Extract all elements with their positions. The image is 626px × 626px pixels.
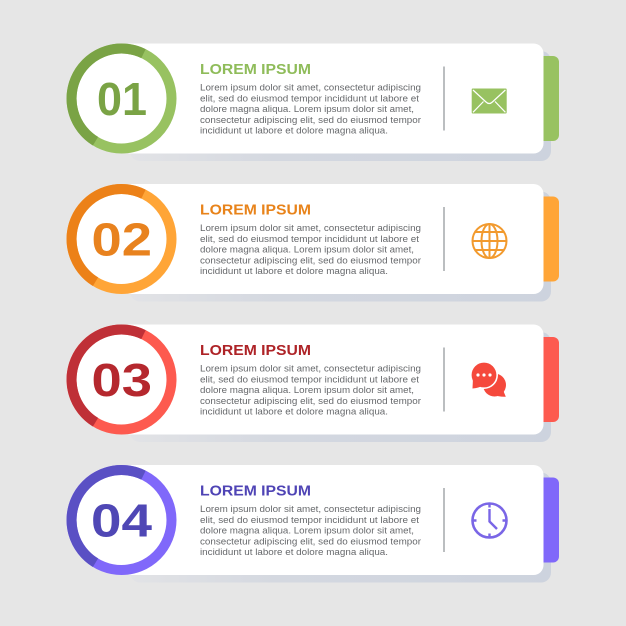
card shadow — [130, 51, 551, 161]
icon: clock — [472, 504, 506, 538]
tab: purple — [530, 478, 559, 562]
text block: consectetur adipiscing elit, sed do eiusmod tempor — [200, 536, 422, 547]
heading: LOREM IPSUM — [200, 342, 311, 359]
text block: dolore magna aliqua. Lorem ipsum dolor sit amet, — [200, 526, 414, 536]
text block: elit, sed do eiusmod tempor incididunt ut labore et — [200, 374, 419, 385]
text block: incididunt ut labore et dolore magna aliqua. — [200, 126, 388, 136]
heading: LOREM IPSUM — [200, 482, 311, 499]
panel: step 03 — [72, 324, 559, 442]
card — [121, 184, 544, 294]
number 03: 03 — [92, 354, 152, 406]
divider — [443, 66, 445, 130]
panel: step 01 — [72, 44, 559, 161]
card — [121, 44, 544, 154]
panel: step 04 — [72, 465, 559, 582]
text block: dolore magna aliqua. Lorem ipsum dolor sit amet, — [200, 244, 414, 256]
text block: incididunt ut labore et dolore magna aliqua. — [200, 266, 388, 277]
text block: Lorem ipsum dolor sit amet, consectetur adipiscing — [200, 504, 421, 515]
panel: step 02 — [72, 184, 559, 302]
number ring — [72, 470, 172, 570]
card — [121, 465, 544, 575]
text block — [200, 223, 422, 277]
text block: dolore magna aliqua. Lorem ipsum dolor sit amet, — [200, 385, 414, 396]
icon: chat bubbles — [470, 361, 506, 397]
text block: consectetur adipiscing elit, sed do eiusmod tempor — [200, 255, 422, 266]
card shadow — [130, 472, 551, 582]
divider — [443, 207, 445, 271]
text block: incididunt ut labore et dolore magna aliqua. — [200, 547, 388, 558]
tab: orange — [530, 196, 559, 282]
text block — [200, 82, 422, 136]
text block: Lorem ipsum dolor sit amet, consectetur adipiscing — [200, 223, 421, 234]
text block: elit, sed do eiusmod tempor incididunt ut labore et — [200, 515, 419, 526]
number 01: 01 — [97, 73, 147, 125]
text block: consectetur adipiscing elit, sed do eiusmod tempor — [200, 396, 422, 407]
tab: red — [530, 337, 559, 422]
divider — [443, 348, 445, 412]
number ring — [72, 330, 172, 430]
number 04: 04 — [91, 494, 152, 546]
text block: consectetur adipiscing elit, sed do eiusmod tempor — [200, 115, 422, 126]
text block: incididunt ut labore et dolore magna aliqua. — [200, 406, 388, 418]
text block — [200, 504, 422, 558]
text block: Lorem ipsum dolor sit amet, consectetur adipiscing — [200, 364, 421, 374]
divider — [443, 488, 445, 552]
card shadow — [130, 332, 551, 442]
number ring — [72, 189, 172, 289]
number ring — [72, 48, 172, 148]
icon: envelope — [472, 88, 507, 114]
text block: Lorem ipsum dolor sit amet, consectetur adipiscing — [200, 82, 421, 94]
number 02: 02 — [92, 214, 152, 266]
heading: LOREM IPSUM — [200, 61, 311, 78]
card shadow — [130, 192, 551, 302]
text block: dolore magna aliqua. Lorem ipsum dolor sit amet, — [200, 104, 414, 115]
card — [121, 324, 544, 434]
heading: LOREM IPSUM — [200, 201, 311, 218]
text block: elit, sed do eiusmod tempor incididunt ut labore et — [200, 93, 419, 104]
text block — [200, 364, 422, 418]
text block: elit, sed do eiusmod tempor incididunt ut labore et — [200, 234, 419, 245]
icon: globe — [472, 224, 506, 258]
tab: green — [530, 56, 559, 141]
